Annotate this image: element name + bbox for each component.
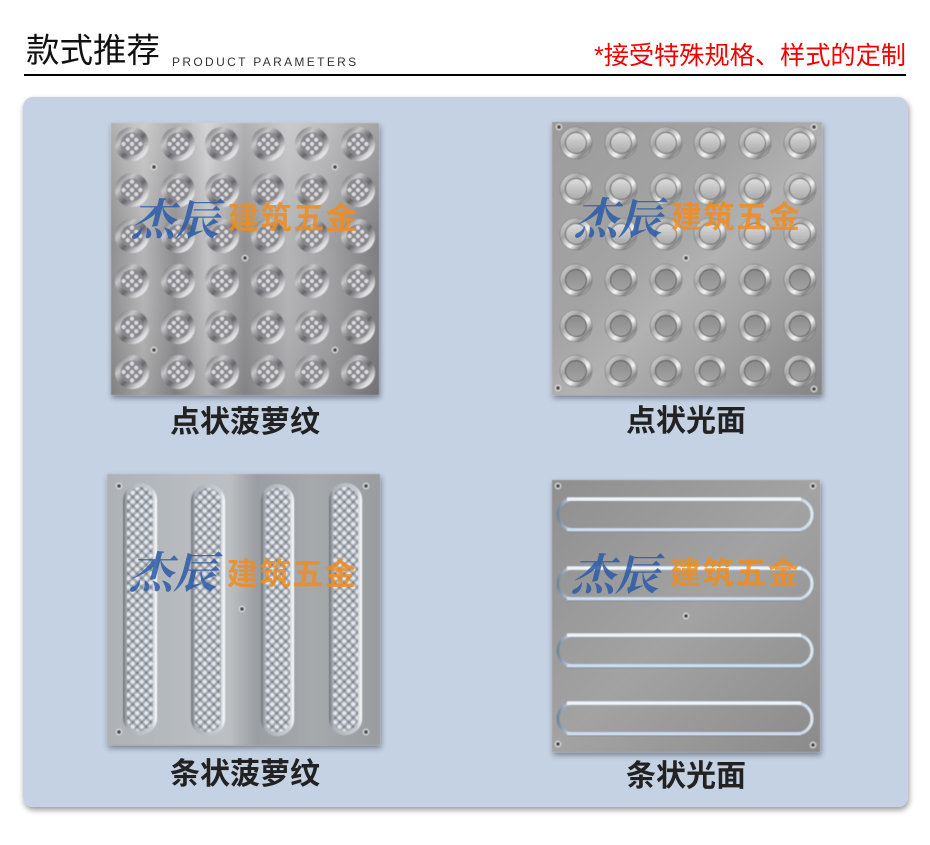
watermark: 建筑五金: [670, 556, 800, 591]
watermark: 杰辰: [131, 196, 225, 245]
watermark: 杰辰: [574, 195, 668, 244]
panel: striped pineapple plate: [107, 474, 380, 791]
label: 点状菠萝纹: [170, 406, 320, 439]
title: 款式推荐: [26, 33, 160, 70]
subtitle: PRODUCT PARAMETERS: [172, 55, 359, 69]
watermark: 建筑五金: [228, 201, 358, 236]
watermark: [574, 195, 801, 244]
watermark: [571, 551, 800, 600]
panel: striped smooth plate: [552, 480, 820, 793]
label: 点状光面: [626, 405, 746, 438]
panel: dotted pineapple plate: [111, 123, 379, 439]
label: 条状菠萝纹: [170, 758, 320, 791]
label: 条状光面: [626, 760, 746, 793]
panel: dotted smooth plate: [552, 122, 822, 438]
plate with bars: [552, 480, 820, 752]
watermark: 杰辰: [129, 549, 223, 598]
panel: product background: [23, 97, 908, 807]
plate with domes: [552, 122, 822, 395]
watermark: 杰辰: [571, 551, 665, 600]
plate with bars: [107, 474, 380, 745]
watermark: [131, 196, 358, 245]
header: [24, 33, 906, 76]
watermark: 建筑五金: [227, 557, 357, 592]
watermark: [129, 549, 357, 598]
watermark: 建筑五金: [671, 200, 801, 235]
header rule: [24, 74, 906, 76]
plate with domes: [111, 123, 379, 395]
custom spec note: *接受特殊规格、样式的定制: [594, 42, 906, 70]
